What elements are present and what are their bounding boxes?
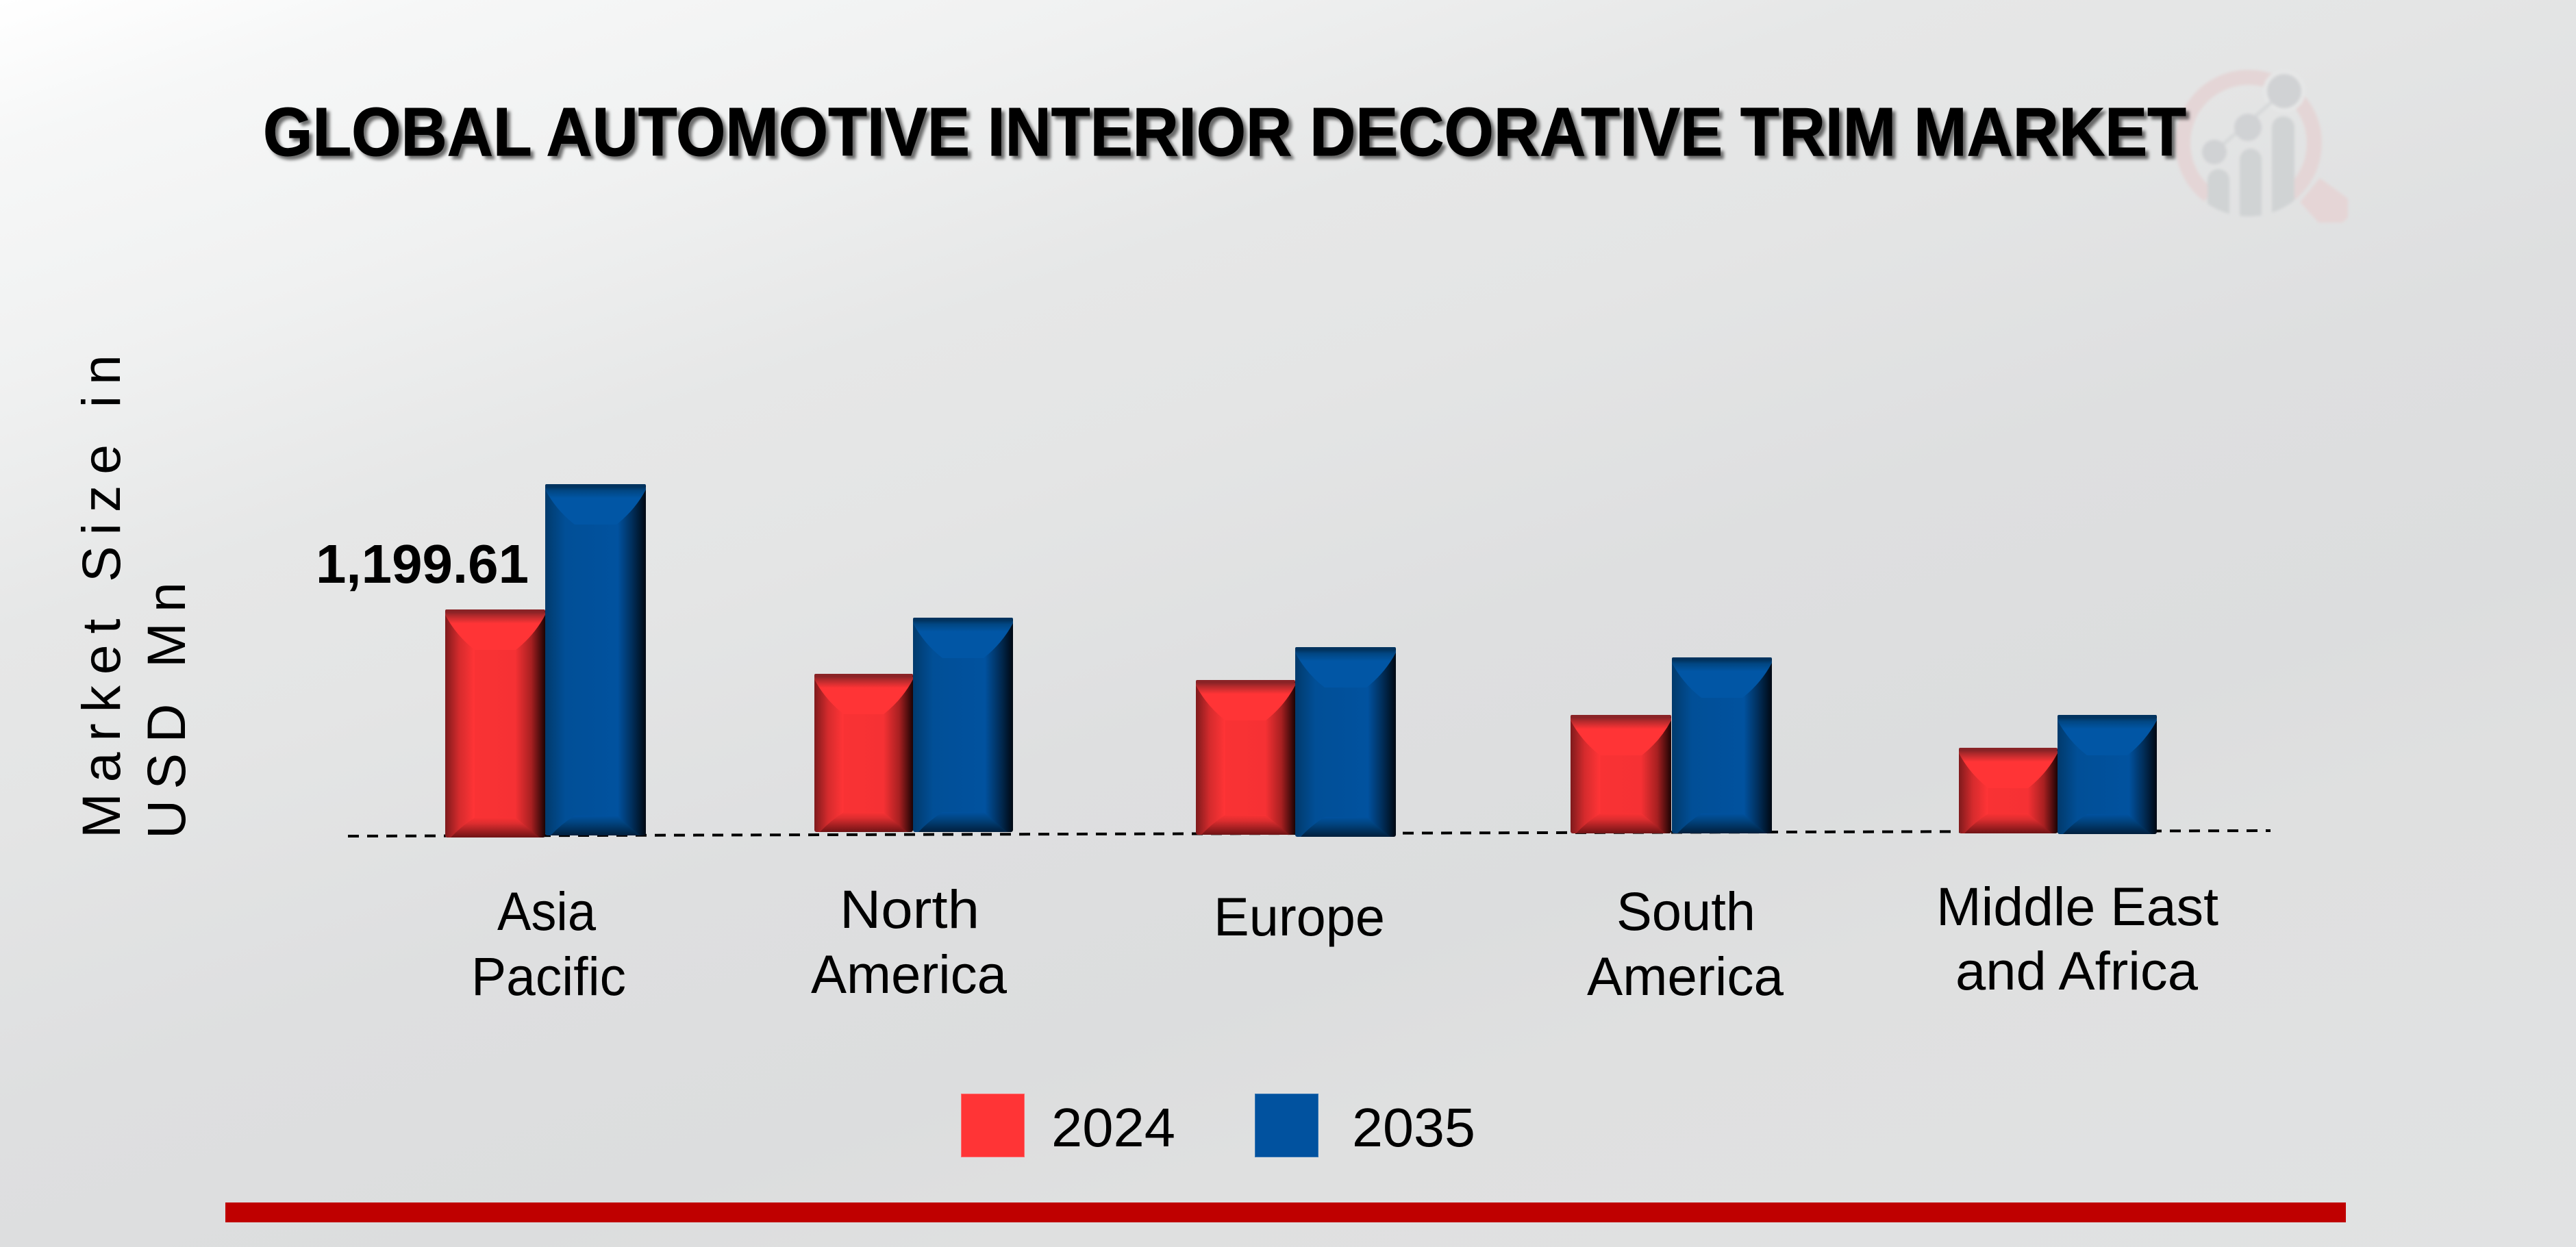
y-axis title: USD Mn bbox=[136, 582, 197, 839]
value label: 1,199.61 bbox=[316, 533, 529, 594]
category labels: South bbox=[1616, 881, 1755, 942]
category labels: America bbox=[1587, 946, 1784, 1007]
bar chart bbox=[445, 484, 2157, 837]
region group: Asia Pacific bbox=[445, 484, 646, 837]
icon: watermark logo bbox=[2183, 70, 2348, 233]
legend bbox=[962, 1094, 1475, 1158]
category labels: America bbox=[811, 944, 1007, 1005]
dashed baseline bbox=[348, 831, 2271, 836]
footer red bar bbox=[225, 1202, 2346, 1222]
category labels: North bbox=[840, 879, 979, 940]
category labels: Pacific bbox=[471, 946, 626, 1007]
category labels bbox=[471, 876, 2218, 1007]
region group: Europe bbox=[1196, 647, 1396, 837]
y-axis title bbox=[71, 355, 197, 839]
region group: North America bbox=[814, 618, 1013, 832]
region group: South America bbox=[1571, 657, 1772, 833]
category labels: Europe bbox=[1214, 886, 1385, 947]
region group: Middle East and Africa bbox=[1959, 715, 2157, 834]
legend: 2024 bbox=[1051, 1097, 1175, 1158]
legend: 2035 bbox=[1352, 1097, 1475, 1158]
title: GLOBAL AUTOMOTIVE INTERIOR DECORATIVE TRIM MARKET bbox=[263, 94, 2186, 171]
category labels: Middle East bbox=[1936, 876, 2218, 937]
category labels: Asia bbox=[497, 881, 596, 942]
y-axis title: Market Size in bbox=[71, 355, 132, 838]
category labels: and Africa bbox=[1955, 940, 2198, 1001]
